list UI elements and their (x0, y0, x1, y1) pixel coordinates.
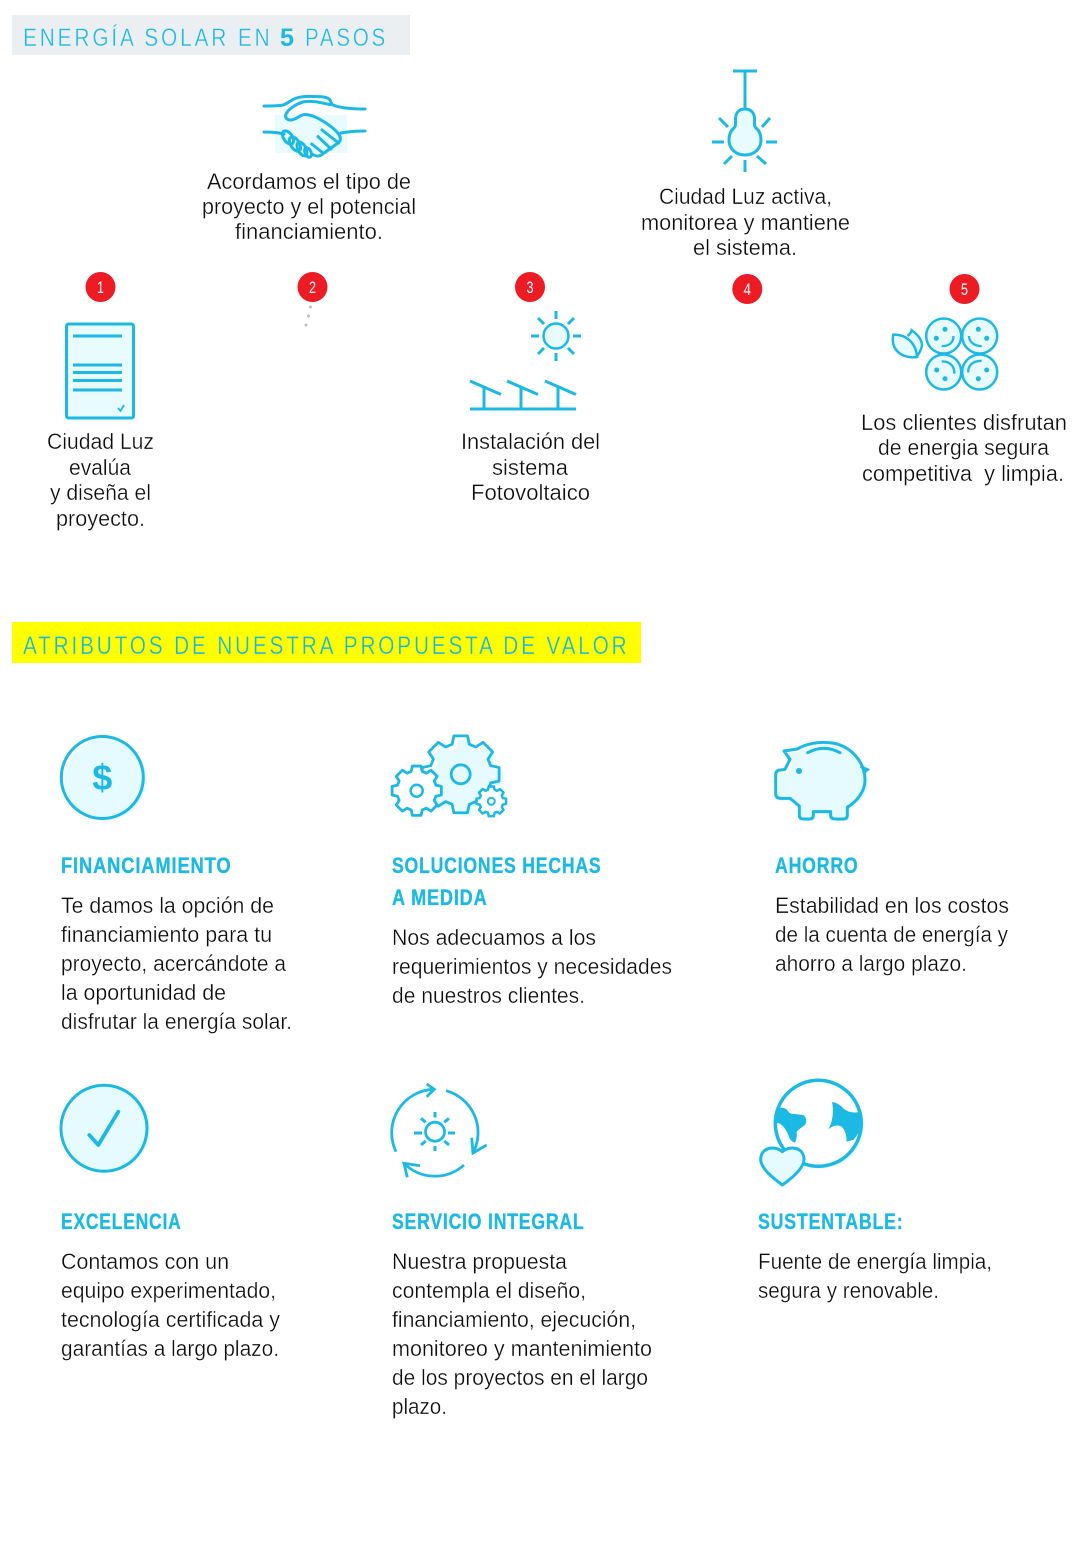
text: step 2 description: proyecto y el potencial (202, 194, 416, 219)
text: ahorro description: Estabilidad en los costos (775, 893, 1009, 918)
icon: sun and solar panels (470, 311, 581, 409)
text: step 3 description: Instalación del (461, 429, 600, 454)
text: step 5 description (861, 410, 1067, 486)
text: step 2 description: financiamiento. (235, 219, 383, 244)
dotted connector (304, 306, 312, 326)
icon: document (66, 324, 134, 418)
number badge 3: 3 (526, 278, 534, 297)
text: servicio integral description: Nuestra propuesta (392, 1249, 567, 1274)
number badge 2: 2 (309, 278, 316, 297)
text: servicio integral description: plazo. (392, 1394, 447, 1419)
heading: ahorro: AHORRO (775, 853, 858, 878)
panel: step 1 (47, 272, 154, 531)
text: soluciones description: requerimientos y necesidades (392, 954, 672, 979)
icon: solar cycle arrows (392, 1084, 487, 1177)
text: servicio integral description: financiamiento, ejecución, (392, 1307, 636, 1332)
panel: financiamiento (61, 736, 292, 1034)
text: step 4 description: monitorea y mantiene (641, 210, 850, 235)
panel: excelencia (61, 1085, 281, 1361)
panel: step 5 (861, 274, 1067, 486)
text: financiamiento description: financiamiento para tu (61, 922, 272, 947)
text: ahorro description (775, 893, 1009, 976)
icon: hanging light bulb (712, 71, 777, 172)
text: sustentable description: segura y renovable. (758, 1278, 939, 1303)
text: financiamiento description: proyecto, acercándote a (61, 951, 286, 976)
text: financiamiento description: Te damos la opción de (61, 893, 274, 918)
heading: sustentable: SUSTENTABLE: (758, 1209, 904, 1234)
text: soluciones description: Nos adecuamos a los (392, 925, 596, 950)
text: excelencia description: tecnología certificada y (61, 1307, 281, 1332)
icon: check circle (61, 1085, 150, 1172)
number badge 1: 1 (97, 278, 104, 297)
text: step 4 description (641, 184, 850, 260)
panel: step 2 (202, 96, 416, 326)
text: step 5 description: Los clientes disfrutan (861, 410, 1067, 435)
panel: step 3 (461, 272, 600, 505)
text: step 4 description: el sistema. (693, 235, 797, 260)
text: step 3 description: Fotovoltaico (471, 480, 590, 505)
heading: energía solar en 5 pasos: 5 (280, 24, 294, 52)
text: step 1 description (47, 429, 154, 531)
text: step 4 description: Ciudad Luz activa, (659, 184, 832, 209)
text: financiamiento description: la oportunidad de (61, 980, 226, 1005)
number badge 5: 5 (961, 280, 968, 299)
text: excelencia description: Contamos con un (61, 1249, 229, 1274)
text: excelencia description: garantías a largo plazo. (61, 1336, 279, 1361)
heading: financiamiento: FINANCIAMIENTO (61, 853, 232, 878)
heading: energía solar en 5 pasos (12, 15, 410, 55)
text: step 3 description: sistema (492, 455, 568, 480)
panel: ahorro (775, 742, 1009, 976)
panel: soluciones hechas a medida (392, 736, 672, 1008)
text: step 2 description: Acordamos el tipo de (207, 169, 411, 194)
icon: leaf and happy faces (893, 318, 997, 390)
text: sustentable description (758, 1249, 992, 1303)
text: ahorro description: de la cuenta de energía y (775, 922, 1009, 947)
heading: soluciones hechas a medida: A MEDIDA (392, 885, 488, 910)
text: step 5 description: competitiva y limpia. (862, 461, 1064, 486)
text: soluciones description (392, 925, 672, 1008)
text: step 5 description: de energia segura (878, 435, 1049, 460)
text: step 1 description: proyecto. (56, 506, 145, 531)
icon: handshake (264, 96, 365, 158)
number badge 1 (86, 272, 116, 302)
text: servicio integral description: contempla el diseño, (392, 1278, 586, 1303)
number badge 4 (732, 274, 762, 304)
number badge 5 (950, 274, 980, 304)
heading: servicio integral: SERVICIO INTEGRAL (392, 1209, 584, 1234)
text: ahorro description: ahorro a largo plazo. (775, 951, 967, 976)
text: excelencia description: equipo experimentado, (61, 1278, 276, 1303)
panel: servicio integral (392, 1084, 652, 1419)
text: excelencia description (61, 1249, 281, 1361)
text: step 1 description: y diseña el (50, 480, 151, 505)
icon: globe with heart (761, 1080, 864, 1185)
text: step 2 description (202, 169, 416, 244)
text: financiamiento description: disfrutar la energía solar. (61, 1009, 292, 1034)
text: servicio integral description (392, 1249, 652, 1419)
text: financiamiento description (61, 893, 292, 1034)
heading: atributos de nuestra propuesta de valor (12, 622, 641, 663)
panel: sustentable (758, 1080, 992, 1303)
text: sustentable description: Fuente de energía limpia, (758, 1249, 992, 1274)
icon: piggy bank (776, 742, 868, 821)
heading: energía solar en 5 pasos: PASOS (305, 24, 388, 52)
number badge 2 (298, 272, 328, 302)
heading: excelencia: EXCELENCIA (61, 1209, 182, 1234)
text: step 1 description: evalúa (69, 455, 131, 480)
number badge 3 (515, 272, 545, 302)
text: soluciones description: de nuestros clientes. (392, 983, 585, 1008)
icon: dollar coin (61, 736, 146, 820)
icon: dollar coin: $ (92, 757, 112, 798)
text: step 1 description: Ciudad Luz (47, 429, 154, 454)
heading: soluciones hechas a medida: SOLUCIONES HECHAS (392, 853, 602, 878)
text: servicio integral description: de los proyectos en el largo (392, 1365, 648, 1390)
heading: atributos de nuestra propuesta de valor: ATRIBUTOS DE NUESTRA PROPUESTA DE VALOR (23, 632, 630, 660)
icon: gears (392, 736, 506, 816)
number badge 4: 4 (744, 280, 751, 299)
text: step 3 description (461, 429, 600, 505)
heading: energía solar en 5 pasos: ENERGÍA SOLAR EN (23, 23, 272, 52)
panel: step 4 (641, 71, 850, 304)
heading: soluciones hechas a medida (392, 853, 602, 910)
text: servicio integral description: monitoreo y mantenimiento (392, 1336, 652, 1361)
